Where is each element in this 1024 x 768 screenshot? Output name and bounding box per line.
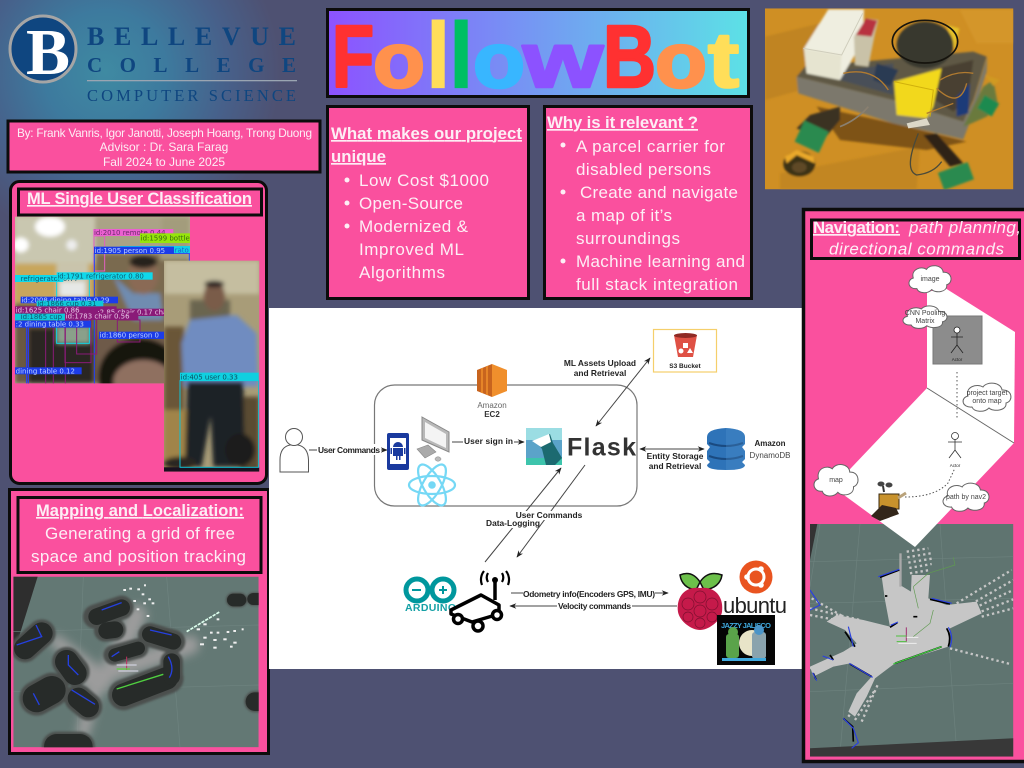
- banner: FollowBot title: w: [522, 16, 603, 104]
- byline box: By: Frank Vanris, Igor Janotti, Joseph Hoang, Trong Duong: [17, 126, 312, 140]
- list: relevance points: full stack integration: [576, 275, 738, 294]
- heading: ML classification: ML Single User Classification: [27, 190, 252, 208]
- arrow: entity storage and retrieval: and Retrieval: [649, 461, 701, 471]
- icon: Wall-E robot: [871, 482, 906, 521]
- cloud: path by nav2: path by nav2: [946, 494, 986, 501]
- panel: system architecture diagram: [269, 308, 802, 669]
- heading: navigation: [812, 218, 1021, 258]
- arrow: data logging: Data-Logging: [486, 518, 540, 528]
- list: unique points: Low Cost $1000: [359, 171, 489, 190]
- icon: Flask logo: Flask: [567, 434, 636, 462]
- list: relevance points: a map of it’s: [576, 206, 672, 225]
- panel: ML single user classification: [10, 182, 266, 484]
- map: occupancy costmap: [13, 577, 263, 747]
- icon: Amazon EC2: EC2: [484, 410, 500, 419]
- heading: navigation: Navigation:: [813, 218, 900, 237]
- arrow: user commands to robot: [516, 465, 585, 557]
- arrow: velocity commands: [510, 601, 677, 611]
- heading: ML classification: [18, 189, 262, 215]
- heading: navigation: directional commands: [829, 240, 1004, 258]
- photo: object detection kitchen: refrigerator 0.77: [21, 275, 78, 283]
- panel: why is it relevant: [544, 106, 752, 298]
- icon: react: [409, 461, 455, 509]
- banner: FollowBot title: o: [655, 16, 707, 104]
- icon: rover with antenna: [451, 571, 509, 631]
- arrow: user commands to robot: User Commands: [516, 510, 583, 520]
- cloud: path by nav2: [943, 483, 989, 511]
- photo: object detection kitchen: rato: [175, 246, 189, 254]
- arrow: entity storage and retrieval: Entity Storage: [647, 451, 704, 461]
- diagram: project target onto map: Actor: [952, 357, 963, 362]
- photo: object detection kitchen: id:2010 remote 0.44: [94, 229, 166, 237]
- list: relevance points: A parcel carrier for: [576, 137, 725, 156]
- arrow: user commands: User Commands: [318, 445, 380, 455]
- photo: object detection kitchen: id:1783 chair 0.56: [66, 313, 130, 321]
- banner: FollowBot title: l: [448, 3, 474, 109]
- banner: FollowBot title: o: [473, 16, 525, 104]
- arrow: odometry info: Odometry info(Encoders GPS, IMU): [523, 589, 655, 599]
- photo: object detection kitchen: id:1860 person 0: [100, 332, 159, 340]
- photo: object detection kitchen: :2 dining table 0.33: [16, 321, 84, 329]
- arrow: ML assets upload and retrieval: ML Assets Upload: [564, 358, 636, 368]
- list: unique points: Open-Source: [359, 194, 463, 213]
- heading: why relevant: Why is it relevant ?: [547, 113, 698, 132]
- diagram: project target onto map: [814, 266, 1015, 547]
- diagram: project target onto map: Actor: [950, 463, 961, 468]
- arrow: user sign in: [452, 436, 524, 447]
- list: relevance points: Create and navigate: [580, 183, 738, 202]
- cloud: map: [814, 464, 858, 496]
- icon: desktop computer: [417, 417, 449, 461]
- EC2 container box: [374, 385, 637, 506]
- icon: DynamoDB: Amazon: [754, 439, 786, 448]
- heading: mapping and localization: Generating a grid of free: [45, 524, 235, 543]
- panel: navigation: [804, 210, 1024, 762]
- photo: object detection kitchen: [15, 216, 190, 384]
- heading: what makes unique: unique: [331, 147, 386, 166]
- icon: android phone: [387, 433, 409, 470]
- photo: object detection kitchen: id:1865 cup: [21, 313, 63, 321]
- cloud: project target: [963, 383, 1011, 411]
- logo: Bellevue College Computer Science: COLLEGE: [87, 53, 296, 77]
- byline box: Advisor : Dr. Sara Farag: [100, 140, 228, 154]
- list: relevance points: [560, 137, 745, 294]
- photo: object detection kitchen: id:1866 cup 0.31: [37, 300, 97, 308]
- panel: what makes our project unique: [328, 106, 528, 298]
- icon: DynamoDB: DynamoDB: [750, 451, 790, 460]
- heading: what makes unique: [331, 124, 522, 166]
- arrow: data logging: [485, 468, 561, 562]
- banner: FollowBot title: l: [425, 3, 451, 109]
- arrow: ML assets upload and retrieval: [564, 358, 650, 426]
- list: unique points: Modernized &: [359, 217, 469, 236]
- banner: FollowBot title: [328, 3, 748, 109]
- icon: ROS Jazzy Jalisco: [717, 615, 775, 665]
- cloud: project target: project target: [967, 390, 1007, 397]
- heading: navigation: path planning,: [908, 218, 1021, 237]
- photo: object detection kitchen: id:1599 bottle: [141, 235, 190, 243]
- icon: Flask logo: [526, 428, 636, 465]
- icon: S3 bucket: [654, 330, 716, 372]
- icon: Amazon EC2: Amazon: [477, 401, 507, 410]
- list: relevance points: surroundings: [576, 229, 680, 248]
- cloud: CNN pooling matrix: [903, 306, 947, 328]
- icon: Raspberry Pi: [678, 574, 722, 630]
- cloud: image: [909, 266, 951, 293]
- photo: FollowBot robot: [765, 8, 1013, 190]
- cloud: CNN pooling matrix: Matrix: [915, 318, 935, 325]
- byline box: [8, 121, 320, 172]
- banner: FollowBot title: F: [332, 7, 374, 106]
- arrow: ML assets upload and retrieval: and Retrieval: [574, 368, 626, 378]
- logo: Bellevue College Computer Science: [10, 16, 297, 105]
- cloud: CNN pooling matrix: CNN Pooling: [905, 310, 945, 317]
- icon: Ubuntu: ubuntu: [723, 593, 787, 618]
- list: unique points: Algorithms: [359, 263, 445, 282]
- map: navigation laser scan: [810, 524, 1013, 757]
- icon: Ubuntu: [723, 560, 787, 618]
- arrow: user sign in: User sign in: [464, 436, 513, 446]
- banner: FollowBot title: o: [373, 16, 425, 104]
- cloud: image: image: [920, 276, 940, 283]
- banner: FollowBot title: t: [708, 16, 739, 104]
- icon: Amazon EC2: [477, 364, 507, 419]
- heading: mapping and localization: space and position tracking: [31, 547, 246, 566]
- cloud: project target: onto map: [972, 398, 1002, 405]
- photo: detected user: [163, 261, 259, 472]
- logo: Bellevue College Computer Science: BELLEVUE: [87, 22, 296, 51]
- photo: object detection kitchen: id:1791 refrigerator 0.80: [57, 272, 144, 280]
- byline box: Fall 2024 to June 2025: [103, 155, 225, 169]
- list: unique points: [344, 171, 489, 282]
- heading: mapping and localization: [18, 498, 261, 572]
- cloud: map: map: [829, 477, 843, 484]
- list: relevance points: Machine learning and: [576, 252, 745, 271]
- logo: Bellevue College Computer Science: B: [26, 16, 70, 89]
- photo: object detection kitchen: :2.85 chair 0.17 chair: [97, 309, 172, 317]
- list: relevance points: disabled persons: [576, 160, 711, 179]
- photo: object detection kitchen: id:1625 chair 0.86: [16, 306, 80, 314]
- icon: DynamoDB: [707, 428, 790, 470]
- heading: mapping and localization: Mapping and Localization:: [36, 502, 244, 520]
- icon: Arduino: ARDUINO: [405, 602, 456, 614]
- photo: object detection kitchen: id:2008 dining table 0.29: [21, 297, 109, 305]
- logo: Bellevue College Computer Science: COMPUTER SCIENCE: [87, 86, 296, 105]
- arrow: entity storage and retrieval: [640, 449, 704, 471]
- photo: detected user: id:405 user 0.33: [181, 373, 238, 381]
- banner: FollowBot title: B: [603, 7, 656, 106]
- list: unique points: Improved ML: [359, 240, 464, 259]
- arrow: velocity commands: Velocity commands: [558, 601, 631, 611]
- photo: object detection kitchen: dining table 0.12: [16, 367, 75, 375]
- icon: user: [280, 428, 308, 472]
- icon: S3 bucket: S3 Bucket: [669, 363, 702, 370]
- icon: ROS Jazzy Jalisco: JAZZY JALISCO: [721, 621, 771, 630]
- icon: Arduino: [405, 579, 456, 614]
- heading: what makes unique: What makes our project: [331, 124, 522, 143]
- panel: mapping and localization: [10, 490, 268, 754]
- photo: object detection kitchen: id:1905 person 0.95: [95, 247, 165, 255]
